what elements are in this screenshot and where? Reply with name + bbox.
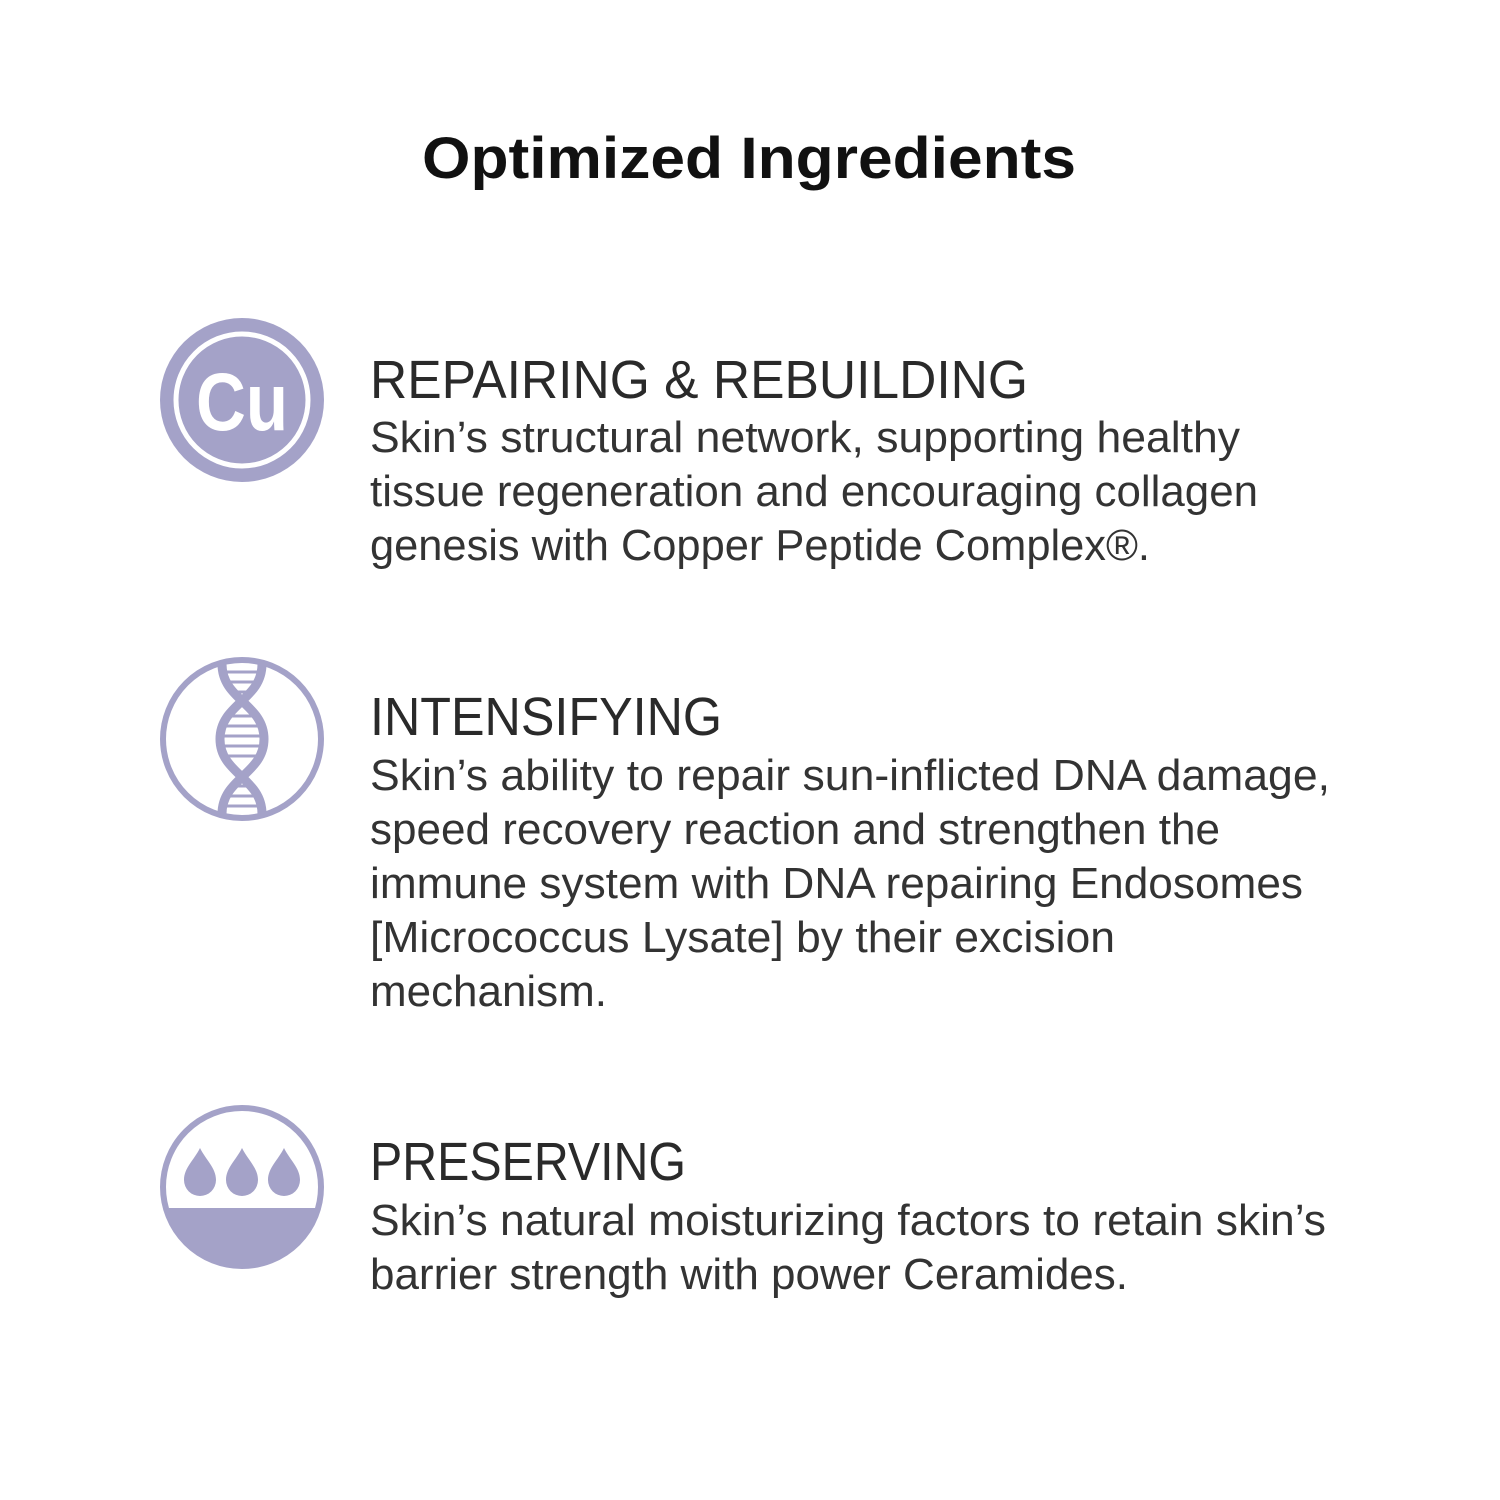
section 2: intensifying — [370, 687, 1330, 1016]
section 1: repairing & rebuilding: genesis with Copper Peptide Complex®. — [370, 521, 1150, 570]
section 2: intensifying: speed recovery reaction and strengthen the — [370, 805, 1220, 854]
title: Optimized Ingredients — [422, 126, 1076, 191]
section 1: repairing & rebuilding: tissue regeneration and encouraging collagen — [370, 467, 1258, 516]
section 2: intensifying: INTENSIFYING — [370, 687, 722, 747]
icon: copper Cu: Cu — [196, 357, 288, 448]
section 2: intensifying: mechanism. — [370, 967, 607, 1016]
section 1: repairing & rebuilding: REPAIRING & REBUILDING — [370, 350, 1028, 410]
section 3: preserving: Skin’s natural moisturizing factors to retain skin’s — [370, 1196, 1326, 1245]
icon: DNA helix — [163, 660, 321, 818]
section 3: preserving: barrier strength with power Ceramides. — [370, 1250, 1128, 1299]
section 2: intensifying: immune system with DNA repairing Endosomes — [370, 859, 1303, 908]
section 1: repairing & rebuilding: Skin’s structural network, supporting healthy — [370, 413, 1240, 462]
icon: water drops — [160, 1105, 324, 1269]
section 2: intensifying: Skin’s ability to repair sun-inflicted DNA damage, — [370, 751, 1330, 800]
section 2: intensifying: [Micrococcus Lysate] by their excision — [370, 913, 1115, 962]
icon: copper Cu — [160, 318, 324, 482]
section 1: repairing & rebuilding — [370, 350, 1258, 570]
section 3: preserving — [370, 1132, 1326, 1299]
section 3: preserving: PRESERVING — [370, 1132, 686, 1192]
